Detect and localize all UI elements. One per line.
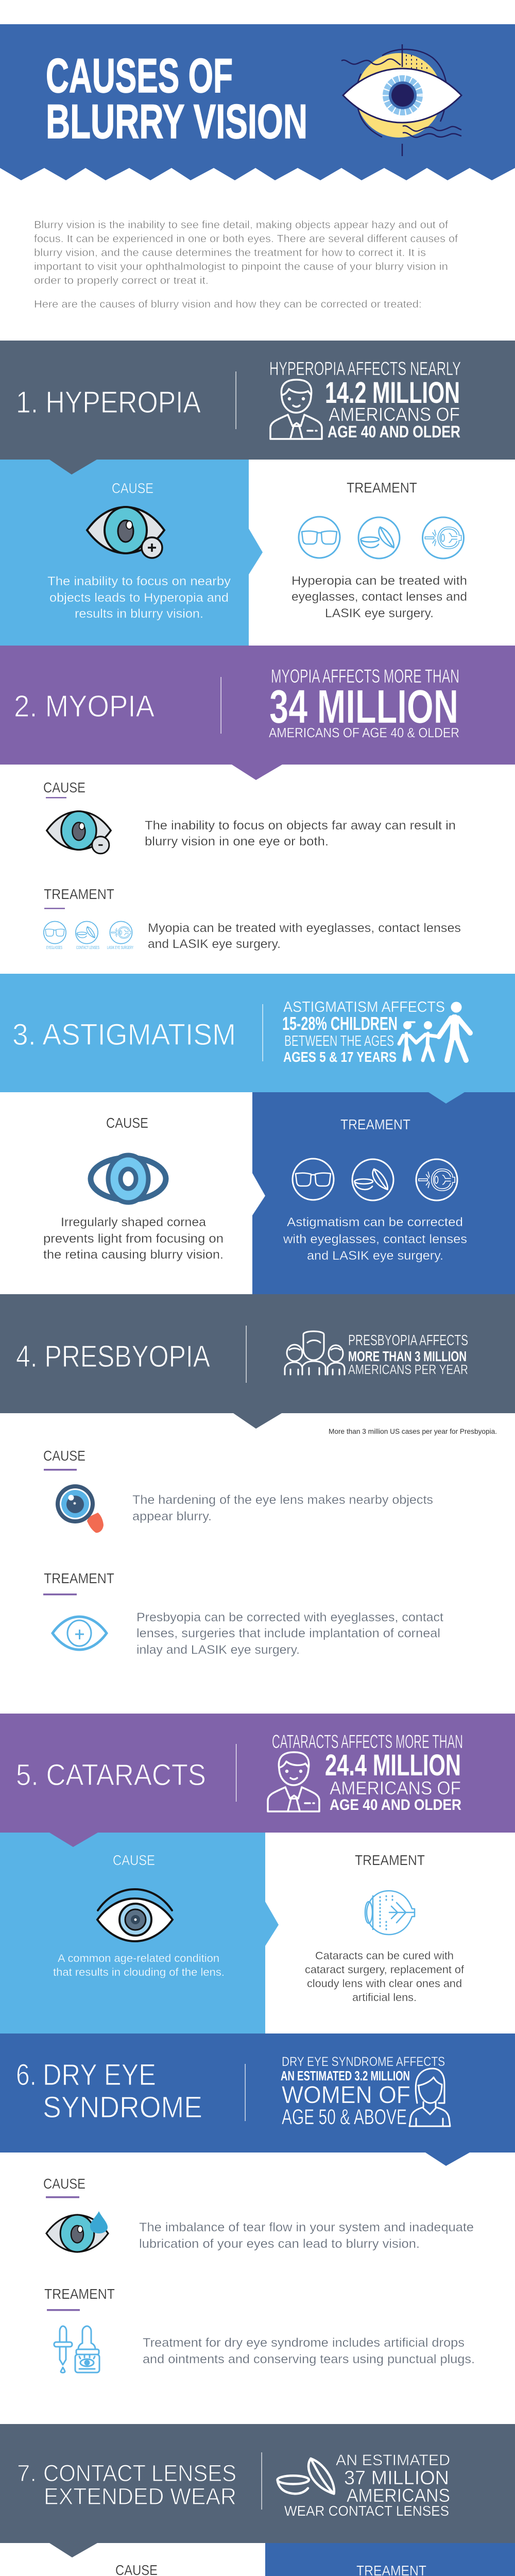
header band bbox=[0, 1294, 515, 1429]
treatment text: with eyeglasses, contact lenses bbox=[283, 1232, 467, 1246]
treatment text: Presbyopia can be corrected with eyeglasses, contact bbox=[136, 1611, 443, 1624]
section title: 4. PRESBYOPIA bbox=[16, 1340, 211, 1374]
panel: page header bbox=[0, 24, 515, 180]
header band bbox=[0, 2424, 515, 2557]
statistic: WOMEN OF bbox=[282, 2081, 410, 2108]
icon: blurry eye bbox=[341, 44, 461, 156]
treatment text: artificial lens. bbox=[352, 1992, 417, 2004]
statistic: AMERICANS OF bbox=[329, 404, 460, 425]
section title: 2. MYOPIA bbox=[14, 689, 155, 723]
panel: 2 myopia bbox=[0, 646, 515, 951]
treatment text: cataract surgery, replacement of bbox=[305, 1964, 464, 1976]
cause text: blurry vision in one eye or both. bbox=[145, 835, 329, 849]
icon: nearsighted eye bbox=[47, 811, 111, 854]
statistic: AGE 50 & ABOVE bbox=[282, 2105, 407, 2129]
icon: eye with plus bbox=[53, 1617, 107, 1650]
footnote: More than 3 million US cases per year for Presbyopia. bbox=[329, 1427, 497, 1435]
statistic: AGE 40 AND OLDER bbox=[328, 422, 460, 441]
icon: eye drops bbox=[54, 2326, 99, 2372]
cause text bbox=[53, 1953, 225, 1978]
statistic: PRESBYOPIA AFFECTS bbox=[348, 1332, 468, 1349]
cause text: The imbalance of tear flow in your system and inadequate bbox=[139, 2221, 474, 2234]
section title: EXTENDED WEAR bbox=[44, 2483, 236, 2510]
panel: 4 presbyopia bbox=[0, 1294, 515, 1657]
cause heading: CAUSE bbox=[43, 779, 85, 795]
underline bbox=[47, 2309, 80, 2311]
cause text bbox=[132, 1493, 433, 1523]
underline bbox=[46, 797, 66, 799]
cause text bbox=[43, 1215, 224, 1262]
intro text: Blurry vision is the inability to see fine detail, making objects appear hazy and out of bbox=[34, 219, 448, 231]
icon: magnifier over eye bbox=[56, 1484, 104, 1533]
underline bbox=[44, 1469, 77, 1470]
treatment icons: LASIK EYE SURGERY bbox=[107, 945, 133, 950]
cause text: The hardening of the eye lens makes nearby objects bbox=[132, 1493, 433, 1507]
treatment panel background bbox=[252, 1092, 515, 1294]
cause heading: CAUSE bbox=[112, 480, 153, 496]
title: CAUSES OF bbox=[46, 48, 233, 103]
treatment text: Hyperopia can be treated with bbox=[291, 574, 467, 588]
cause text: prevents light from focusing on bbox=[43, 1232, 224, 1246]
panel: 6 dry eye syndrome bbox=[0, 2033, 515, 2372]
section title: 6. bbox=[16, 2058, 37, 2092]
cause text: A common age-related condition bbox=[58, 1953, 219, 1964]
header band bbox=[0, 341, 515, 474]
icon: irregular cornea eye bbox=[91, 1155, 166, 1202]
statistic: 37 MILLION bbox=[344, 2467, 449, 2489]
icon: man bbox=[270, 380, 322, 439]
section title: DRY EYE bbox=[43, 2058, 156, 2092]
treatment text: eyeglasses, contact lenses and bbox=[291, 590, 467, 604]
panel: 1 hyperopia bbox=[0, 341, 515, 646]
treatment icons bbox=[299, 517, 464, 558]
statistic: 14.2 MILLION bbox=[325, 376, 460, 410]
header banner with zigzag edge bbox=[0, 24, 515, 180]
icon: farsighted eye bbox=[87, 507, 164, 558]
treatment text: Astigmatism can be corrected bbox=[287, 1215, 463, 1229]
divider bbox=[246, 1326, 247, 1383]
cause text bbox=[145, 819, 456, 849]
header band bbox=[0, 2033, 515, 2166]
header band bbox=[0, 646, 515, 780]
cause text: The inability to focus on objects far away can result in bbox=[145, 819, 456, 833]
statistic: WEAR CONTACT LENSES bbox=[284, 2503, 449, 2519]
treatment text: and ointments and conserving tears using punctual plugs. bbox=[143, 2352, 475, 2366]
section title: 7. bbox=[17, 2460, 37, 2486]
treatment icons: CONTACT LENSES bbox=[76, 945, 99, 950]
statistic bbox=[282, 999, 445, 1065]
section title: SYNDROME bbox=[43, 2091, 202, 2124]
treatment heading: TREAMENT bbox=[44, 886, 114, 902]
treatment heading: TREAMENT bbox=[355, 1852, 425, 1868]
underline bbox=[46, 2196, 79, 2198]
cause text: The inability to focus on nearby bbox=[47, 574, 231, 588]
section title bbox=[17, 2460, 236, 2510]
statistic bbox=[269, 666, 459, 740]
icon: eye with tear bbox=[46, 2211, 108, 2252]
cause text: the retina causing blurry vision. bbox=[43, 1248, 224, 1262]
treatment text: Myopia can be treated with eyeglasses, contact lenses bbox=[148, 921, 461, 935]
panel: 7 contact lenses extended wear bbox=[0, 2424, 515, 2576]
cause text: lubrication of your eyes can lead to blurry vision. bbox=[139, 2237, 420, 2251]
cause text: appear blurry. bbox=[132, 1510, 212, 1523]
intro text: important to visit your ophthalmologist to pinpoint the cause of your blurry vision in bbox=[34, 261, 448, 273]
treatment text bbox=[136, 1611, 443, 1657]
statistic: ASTIGMATISM AFFECTS bbox=[283, 999, 445, 1015]
statistic: 15-28% CHILDREN bbox=[282, 1013, 398, 1034]
icon: clouded eye bbox=[97, 1889, 173, 1941]
icon: three faces bbox=[285, 1331, 345, 1375]
treatment text: inlay and LASIK eye surgery. bbox=[136, 1643, 300, 1657]
statistic bbox=[348, 1332, 468, 1377]
cause text bbox=[47, 574, 231, 621]
panel: 5 cataracts bbox=[0, 1714, 515, 2033]
statistic: 24.4 MILLION bbox=[325, 1749, 461, 1782]
cause text: that results in clouding of the lens. bbox=[53, 1967, 225, 1978]
statistic: AN ESTIMATED 3.2 MILLION bbox=[281, 2068, 410, 2083]
underline bbox=[43, 1594, 77, 1595]
cause heading: CAUSE bbox=[43, 1448, 85, 1464]
treatment text: Cataracts can be cured with bbox=[315, 1950, 454, 1962]
header band bbox=[0, 1714, 515, 1847]
section title: CONTACT LENSES bbox=[43, 2460, 236, 2486]
intro text: blurry vision, and the cause determines the treatment for how to correct it. It is bbox=[34, 247, 426, 259]
icon: retina bbox=[365, 1891, 415, 1935]
treatment text bbox=[283, 1215, 467, 1263]
statistic: AMERICANS PER YEAR bbox=[348, 1362, 468, 1377]
panel: 3 astigmatism bbox=[0, 974, 515, 1294]
title: BLURRY VISION bbox=[46, 94, 307, 148]
treatment text: LASIK eye surgery. bbox=[325, 606, 434, 620]
icon: woman bbox=[409, 2069, 450, 2126]
treatment text: lenses, surgeries that include implantation of corneal bbox=[136, 1626, 440, 1640]
statistic: AGE 40 AND OLDER bbox=[330, 1797, 461, 1814]
icon: contact lenses bbox=[278, 2459, 334, 2494]
icon: adult with children bbox=[399, 1002, 470, 1060]
treatment text: Treatment for dry eye syndrome includes artificial drops bbox=[143, 2336, 465, 2350]
treatment text: and LASIK eye surgery. bbox=[148, 937, 281, 951]
divider bbox=[220, 677, 221, 734]
statistic: AGES 5 & 17 YEARS bbox=[283, 1049, 397, 1065]
statistic: DRY EYE SYNDROME AFFECTS bbox=[282, 2055, 445, 2069]
statistic bbox=[269, 358, 461, 441]
cause panel background bbox=[0, 460, 263, 646]
icon: man bbox=[268, 1752, 319, 1811]
title bbox=[46, 48, 307, 148]
treatment heading: TREAMENT bbox=[340, 1116, 410, 1132]
statistic bbox=[281, 2055, 445, 2129]
cause text: results in blurry vision. bbox=[75, 607, 203, 621]
statistic bbox=[272, 1731, 463, 1814]
statistic: AMERICANS OF bbox=[330, 1777, 461, 1799]
treatment text bbox=[305, 1950, 464, 2004]
statistic: MORE THAN 3 MILLION bbox=[348, 1348, 467, 1364]
treatment text bbox=[148, 921, 461, 951]
intro text: order to properly correct or treat it. bbox=[34, 275, 209, 286]
treatment heading: TREAMENT bbox=[347, 480, 417, 496]
treatment text bbox=[291, 574, 467, 620]
section title bbox=[16, 2058, 202, 2124]
cause text: Irregularly shaped cornea bbox=[61, 1215, 207, 1229]
section title: 3. ASTIGMATISM bbox=[12, 1018, 236, 1052]
statistic: AN ESTIMATED bbox=[336, 2452, 450, 2469]
treatment icons: EYEGLASSES bbox=[46, 945, 62, 950]
treatment heading: TREAMENT bbox=[44, 2286, 115, 2302]
treatment icons bbox=[44, 921, 133, 950]
divider bbox=[245, 2064, 246, 2121]
cause heading: CAUSE bbox=[106, 1115, 148, 1131]
cause text: objects leads to Hyperopia and bbox=[49, 591, 229, 605]
intro text bbox=[34, 219, 458, 310]
treatment heading: TREAMENT bbox=[44, 1570, 114, 1586]
cause heading: CAUSE bbox=[113, 1852, 155, 1868]
treatment panel background bbox=[265, 2543, 515, 2576]
intro text: focus. It can be experienced in one or both eyes. There are several different causes of bbox=[34, 233, 458, 245]
statistic: AMERICANS bbox=[347, 2485, 450, 2506]
treatment text: cloudy lens with clear ones and bbox=[307, 1978, 462, 1990]
cause text bbox=[139, 2221, 474, 2251]
header band bbox=[0, 974, 515, 1104]
intro text: Here are the causes of blurry vision and how they can be corrected or treated: bbox=[34, 299, 422, 310]
treatment text bbox=[143, 2336, 475, 2366]
cause heading: CAUSE bbox=[43, 2176, 85, 2192]
underline bbox=[44, 908, 65, 909]
cause panel background bbox=[0, 1833, 279, 2033]
statistic: BETWEEN THE AGES bbox=[284, 1033, 394, 1049]
treatment icons bbox=[293, 1159, 457, 1200]
section title: 5. CATARACTS bbox=[16, 1758, 206, 1792]
section title: 1. HYPEROPIA bbox=[16, 385, 201, 419]
statistic: AMERICANS OF AGE 40 & OLDER bbox=[269, 725, 459, 740]
statistic bbox=[284, 2452, 450, 2519]
treatment text: and LASIK eye surgery. bbox=[307, 1249, 443, 1263]
